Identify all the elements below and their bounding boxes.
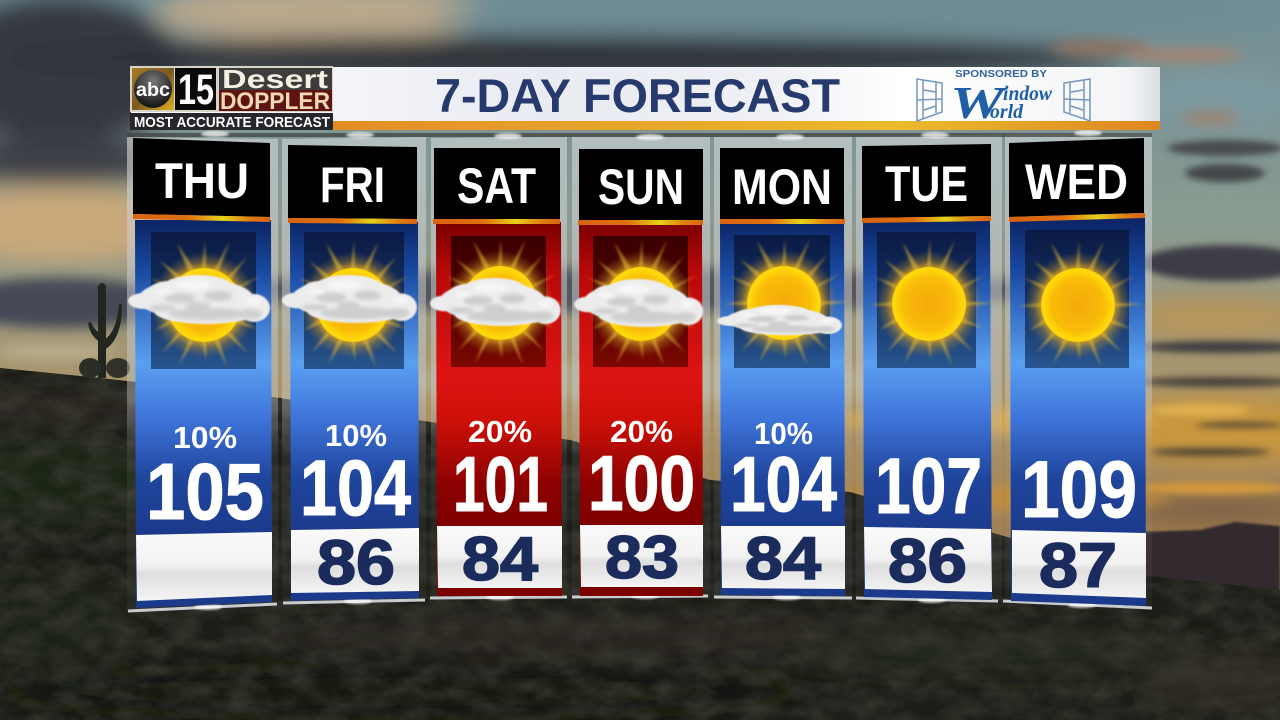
panel: Monday: 84 xyxy=(745,525,822,592)
logo: abc15 Desert Doppler: MOST ACCURATE FORECAST xyxy=(134,114,330,131)
panel: Tuesday: 86 xyxy=(888,527,967,596)
panel: Friday: 86 xyxy=(317,528,395,598)
panel: Saturday xyxy=(430,148,566,596)
panel: Sunday: SUN xyxy=(598,159,684,215)
panel: Saturday: 84 xyxy=(462,525,539,594)
panel: Saturday: SAT xyxy=(457,158,536,214)
sponsor: Window World: orld xyxy=(990,101,1024,123)
panel: Thursday: 105 xyxy=(146,447,264,536)
panel: Saturday: 20% xyxy=(468,414,532,449)
panel: Thursday: 10% xyxy=(173,420,237,455)
panel: Sunday xyxy=(574,149,707,596)
logo: abc15 Desert Doppler: Desert xyxy=(222,64,328,94)
ground xyxy=(0,360,1280,720)
sponsor: Window World: indow xyxy=(1003,81,1053,105)
panel: Friday: 10% xyxy=(325,418,387,453)
title: 7-DAY FORECAST xyxy=(435,69,840,122)
panel: Wednesday: 87 xyxy=(1039,531,1117,601)
sponsor: Window World: W xyxy=(950,77,1008,128)
saguaro cactus xyxy=(79,283,130,378)
panel: Monday: 104 xyxy=(730,440,837,528)
logo: abc15 Desert Doppler xyxy=(130,64,333,131)
panel: Thursday xyxy=(128,138,272,608)
panel: Wednesday: 109 xyxy=(1021,445,1137,535)
sponsor: Window World: SPONSORED BY xyxy=(955,69,1047,80)
icon: left window xyxy=(917,79,942,121)
panel: Monday: 10% xyxy=(754,416,813,451)
panel: Sunday: 83 xyxy=(605,524,679,591)
logo: abc15 Desert Doppler: 15 xyxy=(178,66,214,114)
panel: Monday: MON xyxy=(732,159,832,215)
panel: Tuesday: 107 xyxy=(875,441,982,530)
glass panel frames xyxy=(127,130,1152,612)
panel: Sunday: 100 xyxy=(588,439,695,527)
logo: abc15 Desert Doppler: abc xyxy=(136,80,170,101)
mountains xyxy=(1140,522,1280,600)
title bar xyxy=(131,67,1160,130)
icon: right window xyxy=(1064,79,1090,121)
panel: Friday: 104 xyxy=(300,443,411,532)
panel: Saturday: 101 xyxy=(453,440,548,528)
panel: Sunday: 20% xyxy=(610,414,673,449)
panel: Wednesday xyxy=(1009,138,1146,606)
panel: Wednesday: WED xyxy=(1025,154,1128,210)
panel: Tuesday xyxy=(862,144,995,600)
panel: Friday xyxy=(282,145,419,601)
panel: Thursday: THU xyxy=(155,153,249,209)
sponsor: Window World xyxy=(917,69,1090,128)
logo: abc15 Desert Doppler: DOPPLER xyxy=(220,88,330,115)
panel: Friday: FRI xyxy=(320,157,385,213)
panel: Monday xyxy=(717,148,850,596)
panel: Tuesday: TUE xyxy=(885,156,968,212)
